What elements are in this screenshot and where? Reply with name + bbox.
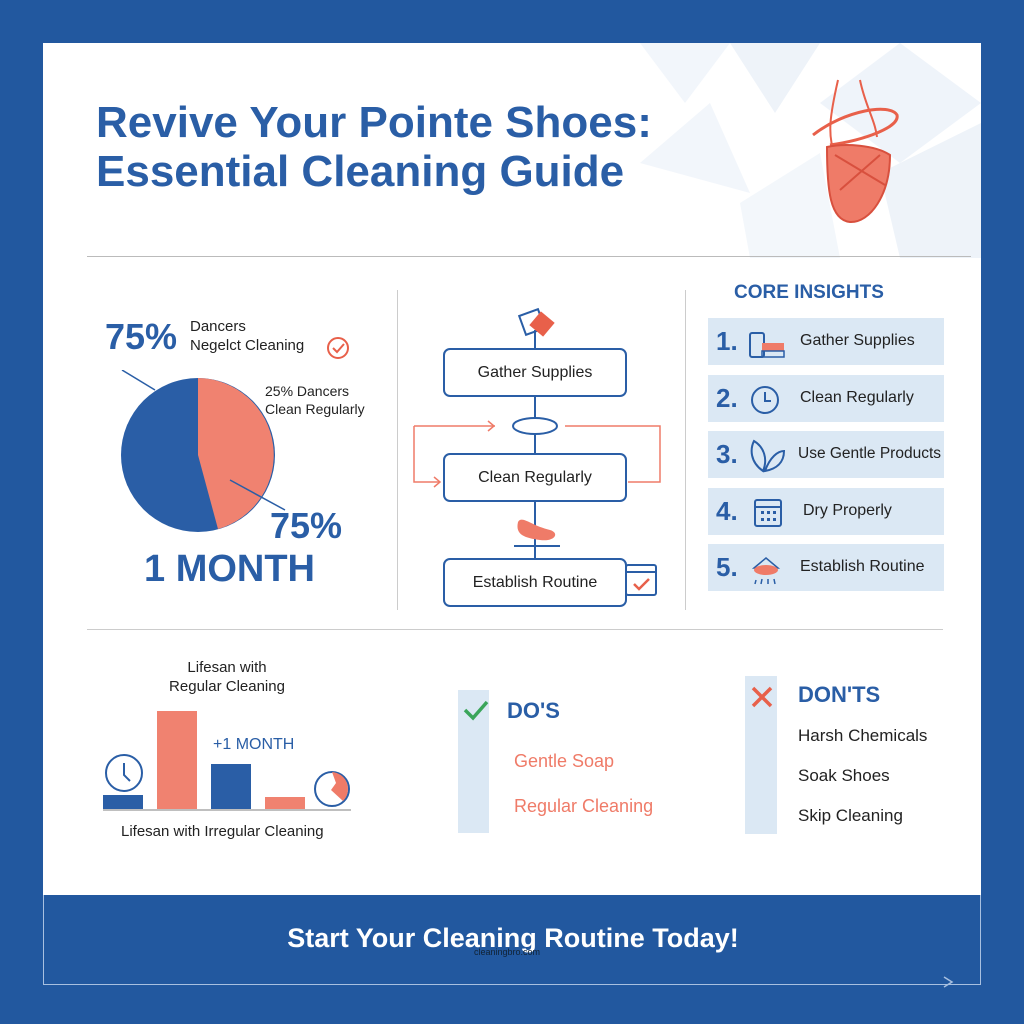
panel: pie stats: 25% Dancers [265, 383, 349, 399]
insight 2: Clean Regularly [800, 389, 914, 406]
box: clean regularly: Clean Regularly [478, 468, 592, 486]
stat 75% neglect: 75% [105, 316, 177, 357]
icon: calendar check [626, 564, 657, 596]
panel: pie stats: Negelct Cleaning [190, 337, 304, 354]
insight 4: Dry Properly [803, 502, 892, 519]
insight 3: Use Gentle Products [798, 445, 941, 462]
footer banner: cleaningbro.com [474, 947, 540, 957]
panel: lifespan bar chart: +1 MONTH [213, 736, 294, 753]
panel: don'ts: Harsh Chemicals [798, 726, 927, 745]
icon: pointe shoe [812, 80, 899, 223]
insight 1: 1. [716, 326, 738, 356]
box: gather supplies [443, 348, 627, 397]
panel: do's: Gentle Soap [514, 751, 614, 771]
icon: check circle [327, 337, 349, 359]
pie chart [121, 370, 286, 532]
icon: cross [752, 686, 772, 708]
insight 3 [708, 431, 944, 478]
panel: don'ts: Skip Cleaning [798, 806, 903, 825]
panel: pie stats: 75% [270, 505, 342, 546]
insight 5 [708, 544, 944, 591]
panel: do's: Regular Cleaning [514, 796, 653, 816]
panel: pie stats: Clean Regularly [265, 401, 365, 417]
panel: lifespan bar chart: Regular Cleaning [169, 678, 285, 695]
insight 2 [708, 375, 944, 422]
arrow [944, 976, 954, 988]
insight 3: 3. [716, 439, 738, 469]
insight 1 [708, 318, 944, 365]
panel: do's [458, 690, 653, 833]
heading: CORE INSIGHTS [734, 282, 884, 303]
panel: do's: DO'S [507, 698, 560, 723]
panel: lifespan bar chart [103, 659, 351, 840]
insight 2: 2. [716, 383, 738, 413]
divider middle [87, 629, 943, 630]
box: establish routine: Establish Routine [473, 574, 597, 590]
icon: check [464, 700, 488, 720]
main card [43, 43, 981, 895]
insight 4: 4. [716, 496, 738, 526]
background geometric pattern [640, 43, 981, 258]
panel: pie stats: 1 MONTH [144, 548, 315, 590]
box: establish routine [443, 558, 627, 607]
panel: lifespan bar chart: Lifesan with Irregular Cleaning [121, 823, 324, 840]
insight 4 [708, 488, 944, 535]
panel: pie stats: Dancers [190, 318, 246, 335]
panel: don'ts: Soak Shoes [798, 766, 890, 785]
panel: flowchart [413, 308, 661, 607]
insight 1: Gather Supplies [800, 332, 915, 349]
insight 5: Establish Routine [800, 558, 925, 575]
title: Essential Cleaning Guide [96, 147, 624, 196]
title [96, 98, 652, 196]
divider top [87, 256, 971, 257]
panel: don'ts: DON'TS [798, 682, 880, 707]
footer banner: Start Your Cleaning Routine Today! [287, 923, 739, 953]
box: clean regularly [443, 453, 627, 502]
panel: pie stats [105, 316, 365, 590]
title: Revive Your Pointe Shoes: [96, 98, 652, 147]
box: gather supplies: Gather Supplies [478, 364, 592, 380]
footer banner [43, 895, 981, 985]
panel: don'ts [745, 676, 927, 834]
insight 5: 5. [716, 552, 738, 582]
panel: lifespan bar chart: Lifesan with [187, 659, 267, 676]
